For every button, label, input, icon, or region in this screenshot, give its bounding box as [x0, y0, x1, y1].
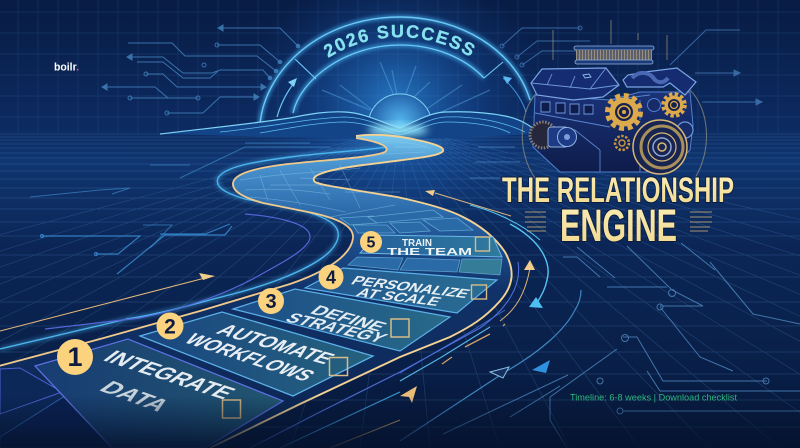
- sparks: [553, 20, 667, 60]
- sun rays: [322, 62, 490, 115]
- mountains: [160, 112, 540, 140]
- step 5: train the team: TRAIN: [402, 238, 432, 249]
- title: ENGINE: [560, 200, 677, 251]
- engine body: [533, 92, 693, 172]
- step 3: define strategy: 3: [265, 291, 277, 313]
- large gold gear: [608, 96, 640, 128]
- step 4: personalize at scale: AT SCALE: [353, 285, 445, 309]
- step 4: personalize at scale: PERSONALIZE: [348, 273, 473, 301]
- step 5: train the team: [360, 231, 502, 258]
- road bricks: middle section: [340, 210, 502, 275]
- left pulley: [530, 122, 576, 148]
- lower vignette: [0, 395, 800, 448]
- circuit traces: upper right: [470, 26, 762, 178]
- step 3: define strategy: [233, 288, 450, 351]
- road edge: gold lines: [0, 135, 519, 448]
- left valve cover: [531, 68, 619, 100]
- step 2: automate workflows: 2: [164, 316, 176, 338]
- road bricks: upper section: [240, 142, 430, 218]
- engine halo: [522, 90, 706, 178]
- perspective floor grid: [0, 128, 800, 448]
- crank pulley: [633, 120, 687, 174]
- footer note: Timeline: 6-8 weeks | Download checklist: [570, 392, 737, 404]
- circuit traces: left floor: [30, 143, 330, 248]
- step 3: define strategy: DEFINE: [306, 302, 391, 334]
- step 5: train the team: 5: [367, 234, 376, 252]
- arrow: blue lower: [532, 360, 550, 373]
- step 1: integrate data: [35, 339, 283, 448]
- decorative road floor panels: [0, 368, 160, 448]
- step 2: automate workflows: AUTOMATE: [211, 321, 339, 368]
- road surface: [0, 135, 512, 448]
- right valve cover: [623, 68, 696, 95]
- step 1: integrate data: DATA: [94, 377, 176, 415]
- right gold gear: [663, 94, 685, 116]
- circuit traces: lower left: [40, 224, 232, 274]
- circuit traces: upper left: [102, 25, 300, 115]
- small gold gear: [615, 136, 629, 150]
- step 4: personalize at scale: 4: [326, 268, 336, 288]
- small idler: [677, 122, 693, 138]
- intake ports: [541, 102, 593, 114]
- outer glow lines along the road: [0, 146, 581, 441]
- body seams: [535, 95, 650, 172]
- engine illustration: [522, 20, 706, 178]
- title decor lines: [525, 212, 712, 231]
- step 2: automate workflows: [140, 312, 373, 396]
- mid pulley: [648, 98, 660, 112]
- step 4: personalize at scale: [305, 264, 497, 313]
- step 1: integrate data: INTEGRATE: [98, 347, 241, 403]
- arc heading: 2026 SUCCESS: 2026 SUCCESS: [324, 24, 474, 58]
- step 5: train the team: THE TEAM: [387, 246, 472, 258]
- background square grid: [0, 0, 800, 133]
- arrow: gold lower: [400, 386, 417, 403]
- step 3: define strategy: STRATEGY: [281, 310, 392, 346]
- step 2: automate workflows: WORKFLOWS: [179, 331, 320, 385]
- logo: boilr.: [54, 62, 79, 74]
- sun: [369, 94, 431, 132]
- air filter: [574, 46, 654, 64]
- circuit traces: right: [443, 243, 800, 448]
- success arc: [260, 17, 530, 124]
- arrow: dark blue lower: [490, 367, 509, 378]
- title: [502, 171, 734, 251]
- step 1: integrate data: 1: [67, 342, 83, 372]
